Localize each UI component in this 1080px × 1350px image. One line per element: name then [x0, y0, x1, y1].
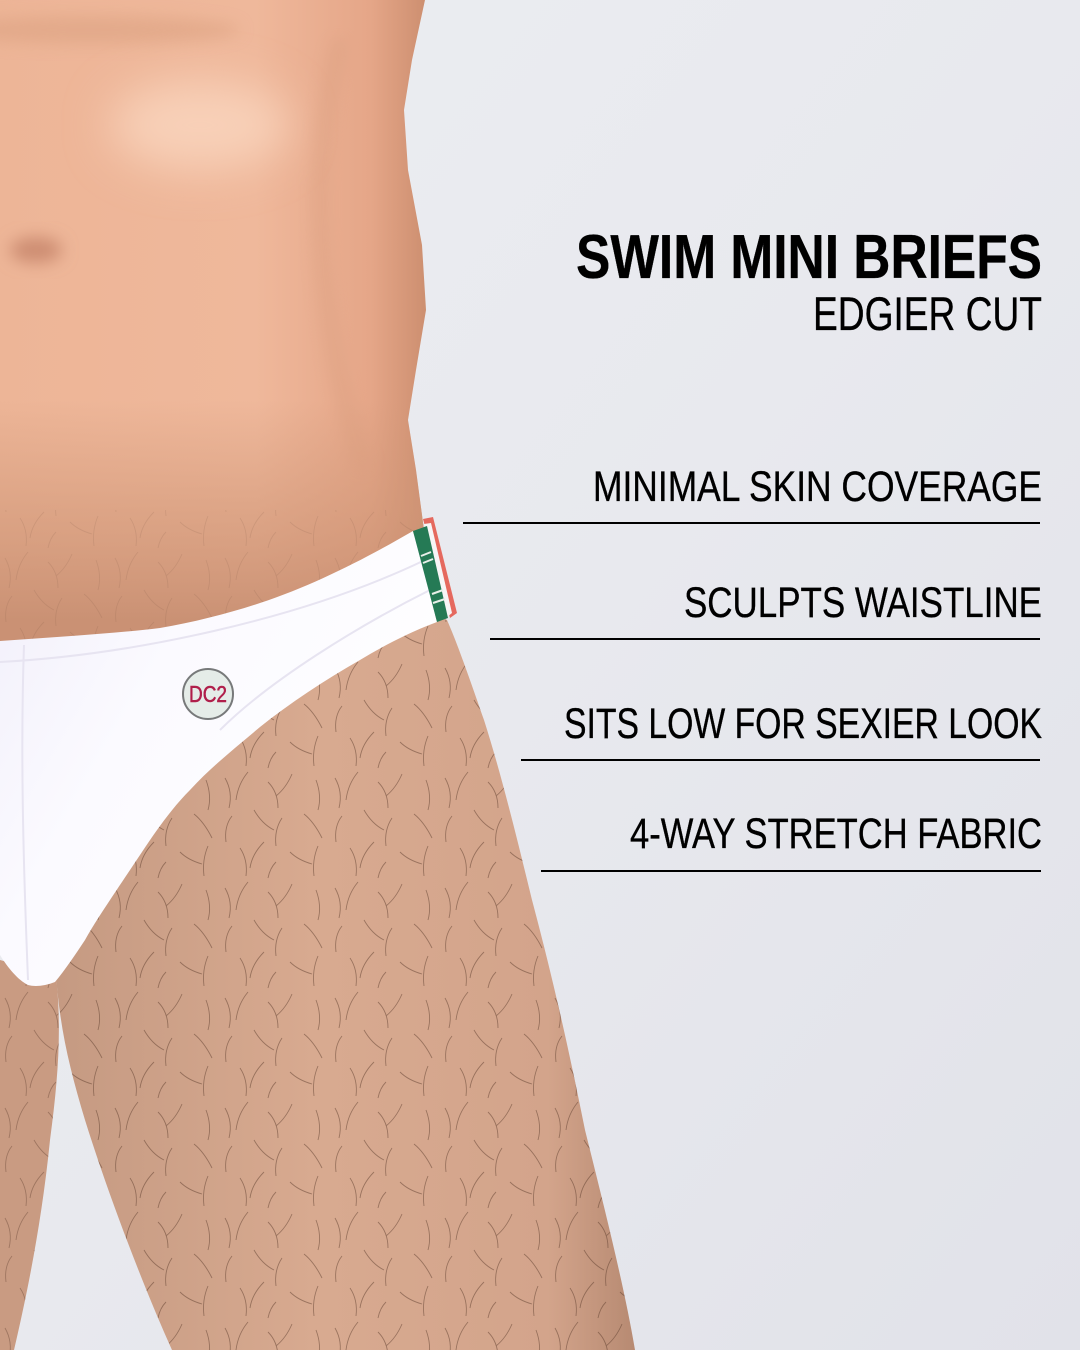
- photo: model body: [0, 0, 635, 1350]
- side stripe trim: [413, 517, 457, 622]
- logo badge: DC2: [189, 681, 227, 707]
- torso: [0, 0, 430, 660]
- heading block: [576, 223, 1042, 340]
- logo badge: [183, 669, 233, 719]
- right thigh: [56, 600, 635, 1350]
- navel: [10, 237, 62, 263]
- seams: [0, 560, 430, 980]
- product: swim mini briefs: [0, 517, 457, 986]
- left thigh: [0, 960, 59, 1350]
- feature list: [463, 463, 1042, 872]
